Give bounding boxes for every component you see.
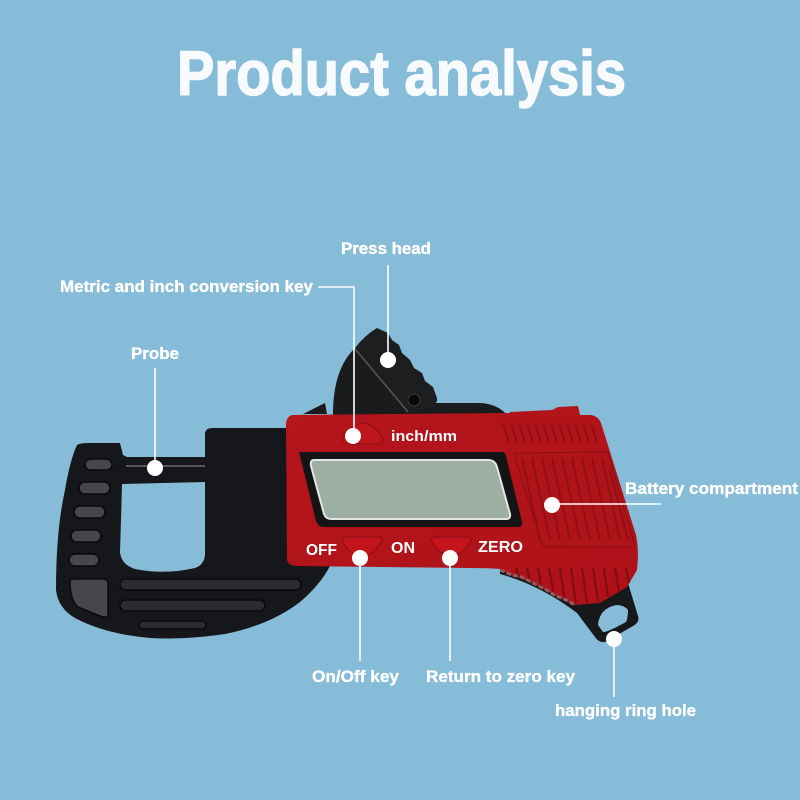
black frame [56, 428, 330, 638]
label: battery compartment [544, 479, 798, 513]
printed labels: ON [391, 540, 415, 557]
label: on/off key: On/Off key [312, 667, 400, 686]
label: probe: Probe [131, 344, 179, 363]
label: metric and inch conversion key [60, 277, 361, 444]
hanging ring [500, 568, 638, 642]
label: hanging ring hole: hanging ring hole [555, 701, 696, 720]
LCD screen [311, 460, 510, 519]
label: on/off key [312, 550, 400, 686]
label: probe [131, 344, 179, 476]
zero button [431, 537, 471, 558]
label: press head [341, 239, 431, 368]
printed labels: inch/mm [391, 428, 457, 445]
label: metric and inch conversion key: Metric and inch conversion key [60, 277, 314, 296]
bottom ridges [516, 568, 629, 604]
grip bars [120, 579, 301, 629]
grip pads [69, 459, 112, 617]
press head [303, 328, 507, 420]
product: digital thickness gauge [56, 328, 638, 642]
LCD bezel [299, 452, 522, 527]
title: Product analysis [177, 38, 626, 109]
toothed grey edge [500, 570, 575, 605]
printed labels [306, 428, 523, 559]
label: return to zero key [426, 550, 576, 686]
battery compartment [515, 452, 635, 547]
ridges: top of battery compartment [503, 423, 597, 442]
label: return to zero key: Return to zero key [426, 667, 576, 686]
red body [286, 406, 638, 605]
label: press head: Press head [341, 239, 431, 258]
printed labels: ZERO [478, 539, 523, 556]
inch/mm button [342, 423, 383, 444]
printed labels: OFF [306, 542, 337, 559]
probe highlight [126, 465, 205, 467]
label: battery compartment: Battery compartment [625, 479, 798, 498]
label: hanging ring hole [555, 631, 696, 720]
off/on button [342, 537, 382, 558]
